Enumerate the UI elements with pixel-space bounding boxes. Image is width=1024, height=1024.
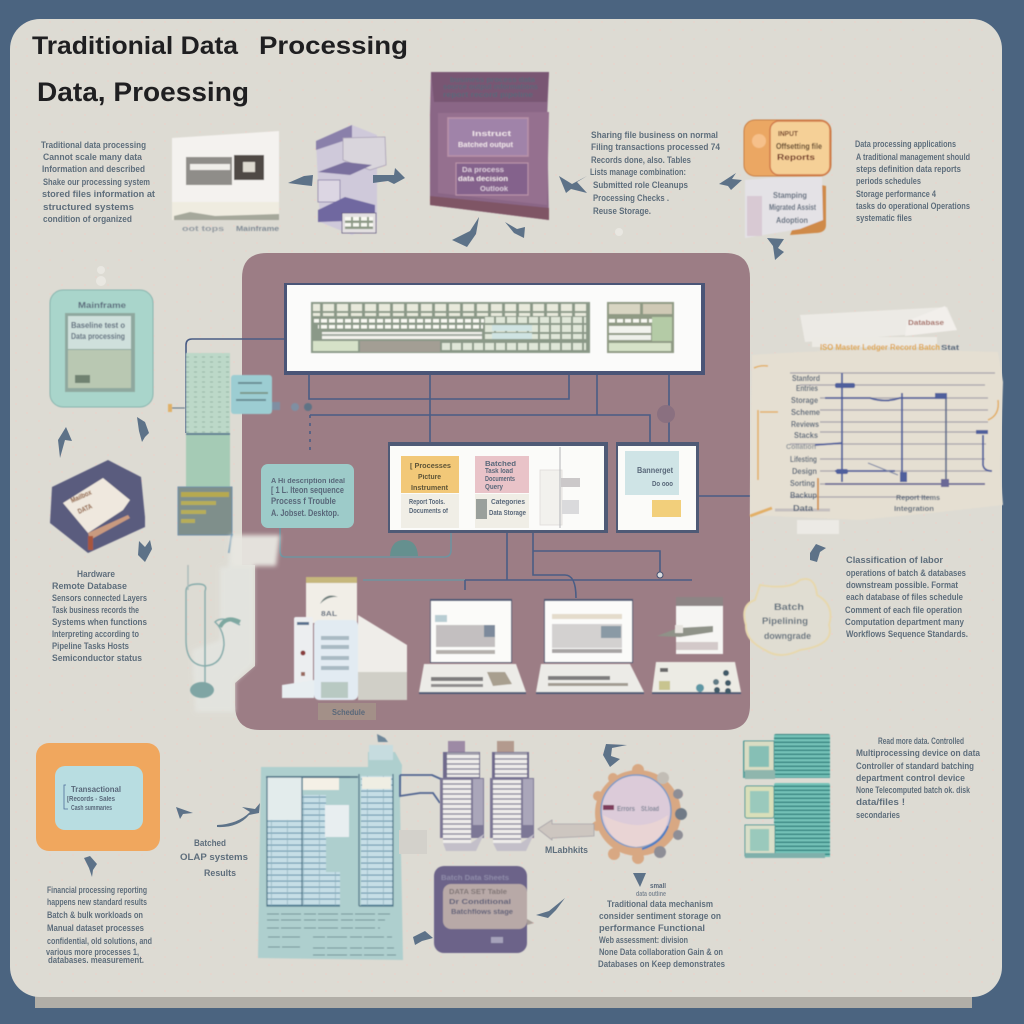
icon: gear with lens: Errors (617, 806, 635, 813)
icon: isometric building (316, 125, 386, 235)
icon: orange note: Offsetting file (776, 142, 822, 151)
teal label: A Hi description ideal (271, 478, 345, 485)
text block: top middle: Reuse Storage. (593, 206, 651, 216)
title (32, 32, 408, 107)
text block: bottom right: secondaries (856, 810, 900, 820)
text block: bottom left: happens new standard results (47, 897, 147, 907)
icon: router node (657, 405, 675, 423)
right caption (475, 494, 529, 528)
laptop one (419, 599, 526, 694)
chart labels: Storage (791, 396, 818, 405)
panel: teal mainframe card: Data processing (71, 332, 125, 341)
series lines (815, 373, 992, 484)
yellow note: [ Processes (410, 463, 451, 470)
laptop two (536, 599, 644, 694)
icon: teal hub dome (390, 540, 418, 556)
top display (284, 283, 705, 375)
panel: orange card (36, 743, 160, 851)
arrow: down to text (84, 856, 97, 877)
caption: batch output: Batched (194, 838, 226, 848)
text block: bottom middle: None Data collaboration Gain & on (599, 947, 723, 957)
purple tablet (434, 866, 534, 953)
icon: notebook page (745, 177, 826, 238)
icon: purple book stack: Outlook (480, 186, 508, 193)
mini chart (540, 447, 580, 528)
orange accents (750, 366, 998, 516)
arrow: book down left (452, 217, 479, 247)
teal label (261, 464, 354, 528)
text block: left middle: Task business records the (52, 605, 139, 615)
icon: purple book stack: Batched output (458, 142, 514, 149)
caption: batch output (180, 838, 248, 878)
text block: right middle: Classification of labor (846, 555, 943, 565)
workstation console (652, 597, 741, 694)
icon: gear with lens: St.load (641, 806, 659, 813)
pink note: Documents (485, 476, 515, 483)
card shadow band (35, 990, 972, 1008)
text block: top right: A traditional management should (856, 152, 970, 162)
text block: bottom left: Manual dataset processes (47, 923, 144, 933)
text block: bottom right: Read more data. Controlled (878, 736, 964, 746)
icon: purple book stack: report record pipeline (443, 92, 533, 99)
paper scraps: Database (908, 320, 944, 327)
icon: gear with lens (592, 764, 687, 864)
flask (186, 565, 240, 698)
right chart: Stat (941, 345, 960, 352)
icon: notebook page: Stamping (773, 191, 807, 200)
icon: dark package: DATA (77, 503, 94, 516)
text block: left middle: Pipeline Tasks Hosts (52, 641, 129, 651)
chart labels: Stacks (794, 431, 819, 440)
printer device: 8AL (321, 611, 338, 618)
icon: orange note (744, 120, 831, 176)
icon: white document screen: Mainframe (236, 226, 279, 233)
text block: right middle: each database of files schedule (846, 592, 963, 602)
arrow: doc to tablet (413, 931, 433, 945)
text block: top right (855, 139, 970, 223)
blob label: Batch (774, 602, 804, 612)
blue note: Transactional (71, 785, 121, 794)
arrow: book down right (505, 222, 525, 238)
data box (178, 487, 232, 535)
icon: notebook page: Adoption (776, 216, 808, 225)
servers (440, 741, 534, 851)
text block: top middle: Sharing file business on normal (591, 130, 718, 140)
chart labels: Sorting (790, 479, 815, 488)
keyboard table (311, 302, 590, 353)
text block: bottom left: Financial processing reporting (47, 885, 147, 895)
text block: top middle: Filing transactions processed 74 (591, 142, 720, 152)
small cap (369, 734, 393, 760)
blob label: downgrade (764, 631, 811, 641)
teal label: A. Jobset. Desktop. (271, 508, 339, 518)
icon: purple book stack: business process data (450, 77, 535, 84)
text block: right middle: Comment of each file operation (845, 605, 962, 615)
chart labels: Reviews (791, 420, 819, 429)
pink note: Task load (485, 468, 513, 475)
text block: left middle: Remote Database (52, 581, 127, 591)
icon: teal chips (743, 734, 830, 858)
text block: top middle: Lists manage combination: (590, 167, 686, 177)
text block: bottom right: department control device (856, 773, 965, 783)
purple tablet: Batchflows stage (451, 909, 513, 916)
text block: left middle (52, 569, 147, 663)
chart labels: Entries (796, 384, 818, 393)
data cables (400, 775, 443, 803)
arrow: notebook down (767, 238, 784, 260)
arrow: triangle down (633, 873, 646, 887)
yellow note: Instrument (411, 485, 449, 492)
icon: purple book stack (430, 72, 549, 220)
icon: notebook page: Migrated Assist (769, 203, 816, 212)
small label: data outline (636, 891, 666, 898)
arrow: document to building (288, 175, 313, 186)
text block: top left: Traditional data processing (41, 140, 146, 150)
server right (490, 741, 534, 851)
blob label: Pipelining (762, 616, 808, 626)
chart labels (786, 374, 940, 513)
text block: top left (41, 140, 155, 224)
arrow: orange note to text (719, 173, 742, 190)
decorative marks: small droplets (96, 228, 623, 286)
text block: top middle: Processing Checks . (593, 193, 669, 203)
small label (636, 883, 666, 898)
text block: right middle: Computation department many (845, 617, 964, 627)
text block: left middle: Interpreting according to (52, 629, 139, 639)
title: Traditionial Data (32, 32, 239, 60)
text block: left middle: Systems when functions (52, 617, 147, 627)
yellow note: Picture (418, 474, 441, 481)
text block: top middle: Records done, also. Tables (591, 155, 691, 165)
label: machine kits: MLabhkits (545, 845, 588, 855)
grid lines (775, 373, 995, 510)
purple tablet: DATA SET Table (449, 889, 507, 896)
icon: dark package (50, 460, 145, 553)
text block: bottom right (856, 736, 981, 820)
text block: bottom middle: performance Functional (599, 923, 705, 933)
text block: bottom left: confidential, old solutions, and (47, 936, 152, 946)
text block: left middle: Semiconductor status (52, 653, 142, 663)
right chart (750, 306, 1003, 534)
arrow: to orange card (176, 807, 193, 819)
yellow note (401, 456, 459, 493)
arrow: down (138, 540, 152, 562)
chip middle (745, 783, 830, 825)
right caption: Data Storage (489, 510, 526, 517)
icon: orange note: INPUT (778, 131, 799, 138)
small label: small (650, 883, 666, 890)
arrow: up right (137, 417, 149, 442)
text block: top middle: Submitted role Cleanups (593, 180, 688, 190)
purple tablet: Dr Conditional (449, 899, 511, 906)
caption: batch output: Results (204, 868, 236, 878)
arrow: gear to servers (538, 820, 594, 840)
text block: bottom right: data/files ! (856, 797, 905, 807)
text block: right middle (845, 555, 968, 639)
text block: bottom left (46, 885, 152, 965)
text block: top left: Cannot scale many data (43, 152, 143, 162)
icon: purple book stack: source output informations (443, 84, 538, 91)
small table (607, 302, 674, 353)
chart markers (835, 383, 988, 487)
text block: top left: structured systems (43, 202, 134, 212)
chart labels: Stanford (792, 374, 820, 383)
icon: purple book stack: Instruct (472, 131, 512, 138)
right caption: Categories (491, 499, 525, 506)
printer label (318, 703, 376, 720)
chart wash (750, 350, 1003, 520)
text block: left middle: Sensors connected Layers (52, 593, 147, 603)
teal switch (231, 375, 312, 414)
pink note: Batched (485, 461, 516, 468)
purple tablet: Batch Data Sheets (441, 875, 509, 882)
ledger document (258, 734, 403, 960)
panel: teal mainframe card: Baseline test o (71, 321, 125, 330)
icon: connection node (657, 572, 663, 578)
panel: teal mainframe card (50, 290, 153, 407)
icon: purple book stack: Da process (462, 167, 504, 174)
chip top (743, 734, 830, 779)
text block: top right: steps definition data reports (856, 164, 961, 174)
blue note (55, 766, 143, 830)
arrow: tablet tick (536, 898, 565, 918)
pale equipment backdrop (192, 535, 280, 712)
text block: bottom middle: Web assessment: division (599, 935, 688, 945)
blue note: Cash summaries (71, 805, 112, 812)
text block: right middle: operations of batch & databases (846, 568, 966, 578)
text block: left middle: Hardware (77, 569, 115, 579)
icon: dark package: Mailbox (70, 489, 93, 505)
icon: white document screen (172, 131, 279, 233)
text block: bottom left: various more processes 1, (46, 947, 139, 957)
side display (616, 442, 699, 533)
connector lines (186, 339, 750, 598)
chart labels: Backup (790, 491, 817, 500)
teal label: [ 1 L. Iteon sequence (271, 485, 344, 495)
text block: top right: Data processing applications (855, 139, 956, 149)
text block: bottom middle: Databases on Keep demonstrates (598, 959, 725, 969)
bottom paper scrap (797, 520, 839, 534)
chart labels: Design (792, 467, 817, 476)
text block: bottom left: Batch & bulk workloads on (47, 910, 143, 920)
text block: top left: Shake our processing system (43, 177, 150, 187)
text block: top left: condition of organized (43, 214, 132, 224)
text block: top right: periods schedules (856, 176, 921, 186)
icon: purple book stack: data decision (458, 176, 508, 183)
title: Processing (259, 32, 408, 60)
text block: bottom left: databases. measurement. (48, 955, 144, 965)
icon: orange note: Reports (777, 153, 816, 162)
chart labels: Data (793, 504, 814, 513)
text block: bottom right: Controller of standard batching (856, 761, 974, 771)
left caption: Report Tools. (409, 499, 445, 506)
text block: bottom middle: consider sentiment storage on (599, 911, 721, 921)
panel: teal mainframe card: Mainframe (78, 301, 127, 310)
chart labels: Report Items (896, 495, 940, 502)
arrow: chart up (810, 544, 826, 562)
pink note: Query (485, 484, 503, 491)
arrow: up left (58, 427, 72, 458)
text block: bottom middle: Traditional data mechanism (607, 899, 713, 909)
text block: top right: Storage performance 4 (856, 189, 936, 199)
text block: top right: tasks do operational Operations (856, 201, 970, 211)
text block: top right: systematic files (856, 213, 912, 223)
chart labels: Scheme (791, 408, 821, 417)
chart labels: Integration (894, 506, 934, 513)
blue note: Do ooo (652, 481, 673, 488)
paper scraps (800, 306, 957, 347)
printer device (282, 577, 407, 700)
text block: bottom right: None Telecomputed batch ok. disk (856, 785, 971, 795)
server left (440, 741, 484, 851)
left caption (401, 494, 459, 528)
blue note: [Records - Sales (67, 796, 115, 803)
arrow: gear up (603, 744, 627, 767)
arrow: text to book (559, 176, 587, 193)
text block: right middle: downstream possible. Format (846, 580, 958, 590)
text block: bottom right: Multiprocessing device on data (856, 748, 981, 758)
arrow: curved from doc (217, 803, 260, 827)
teal label: Process f Trouble (271, 496, 336, 506)
blob label (744, 579, 830, 655)
blue note (625, 451, 679, 495)
panel: central architecture (186, 253, 750, 730)
small grey box (399, 830, 427, 854)
middle display (388, 442, 608, 533)
caption: batch output: OLAP systems (180, 852, 248, 862)
blue note: Bannerget (637, 466, 673, 475)
pink note (475, 456, 529, 493)
chart labels: Lifesting (790, 455, 817, 464)
text block: top left: stored files information at (42, 189, 155, 199)
text block: top middle (590, 130, 720, 216)
text block: top left: Information and described (42, 164, 145, 174)
left caption: Documents of (409, 508, 449, 515)
yellow strip (652, 500, 681, 517)
chart labels: Collation (786, 444, 816, 451)
chart title: ISO Master Ledger Record Batch (820, 343, 940, 352)
arrow: building to book (373, 168, 405, 184)
measuring tower (168, 353, 232, 553)
text block: bottom middle (598, 899, 725, 969)
icon: white document screen: oot tops (182, 226, 224, 233)
chip bottom (745, 824, 830, 858)
title: Data, Proessing (37, 77, 249, 107)
printer label: Schedule (332, 708, 366, 717)
text block: right middle: Workflows Sequence Standards. (846, 629, 968, 639)
